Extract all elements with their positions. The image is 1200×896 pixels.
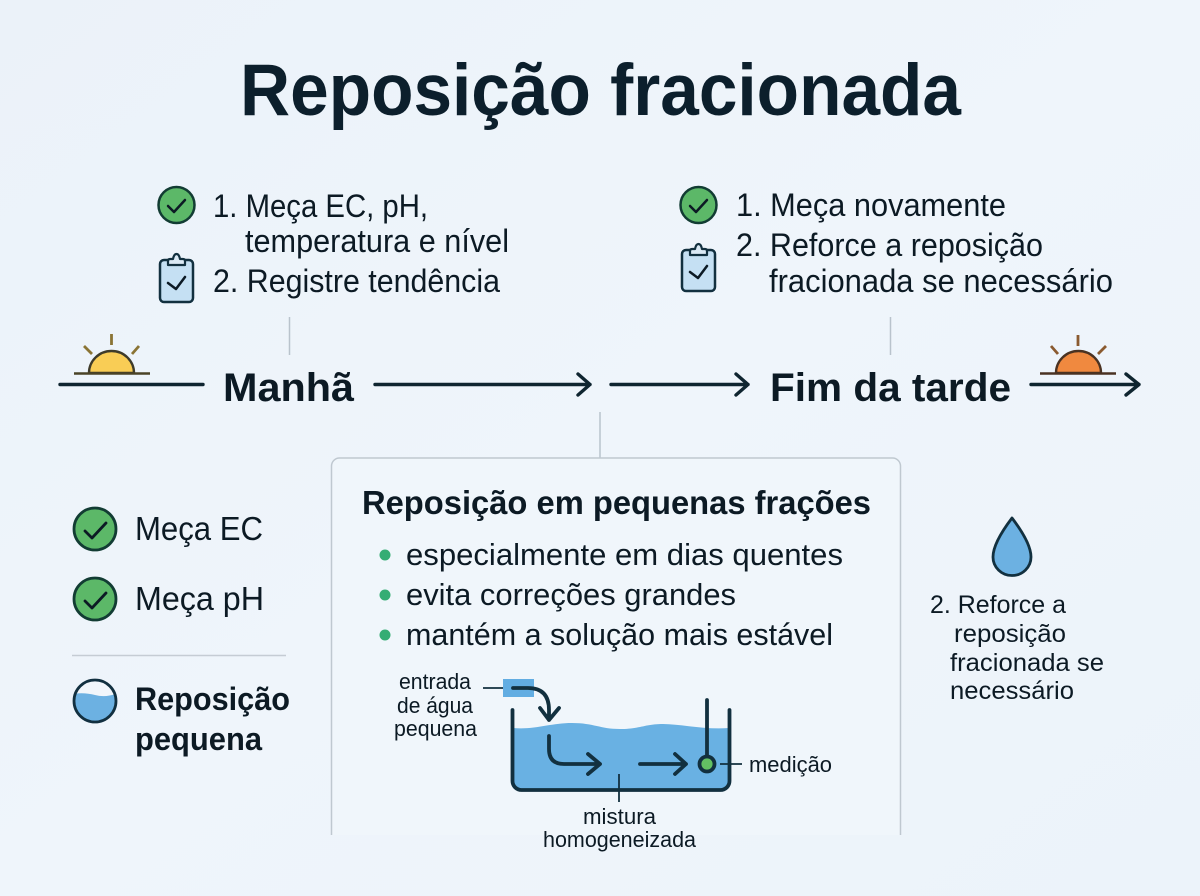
- arrow: after evening: [1031, 374, 1139, 395]
- diagram labels: medição: [749, 752, 832, 777]
- text: reinforce note: reposição: [954, 620, 1066, 648]
- bullet list: evita correções grandes: [406, 577, 736, 612]
- icon: sunrise: [74, 334, 150, 374]
- probe: [700, 700, 742, 772]
- diagram labels: entrada: [399, 669, 472, 694]
- text: step 2 evening: 2. Reforce a reposição: [736, 227, 1043, 263]
- title: Reposição fracionada: [240, 50, 962, 131]
- text: step 2 morning: 2. Registre tendência: [213, 263, 500, 299]
- icon: check pH: [74, 578, 116, 620]
- diagram: tank: [394, 669, 832, 852]
- text: measure pH: Meça pH: [135, 580, 264, 617]
- panel: right note: [930, 518, 1104, 705]
- icon: clipboard: [682, 244, 715, 291]
- icon: green check: [680, 187, 716, 223]
- bullet list: especialmente em dias quentes: [406, 537, 843, 572]
- panel: small fractions card: [332, 458, 900, 852]
- diagram labels: [394, 669, 832, 852]
- bullet list: [380, 537, 843, 652]
- icon: check EC: [74, 508, 116, 550]
- icon: small water level: [72, 680, 119, 727]
- bullet list: mantém a solução mais estável: [406, 617, 833, 652]
- text: step 2 evening: [736, 227, 1113, 299]
- text: reinforce note: [930, 591, 1104, 705]
- mixing arrows: [549, 736, 686, 774]
- text: step 2 evening: fracionada se necessário: [769, 263, 1113, 299]
- diagram labels: pequena: [394, 716, 478, 741]
- text: reinforce note: necessário: [950, 677, 1074, 705]
- text: step 1 evening: 1. Meça novamente: [736, 187, 1006, 223]
- icon: water drop: [993, 518, 1031, 576]
- label: evening: Fim da tarde: [770, 366, 1011, 410]
- text: small top-up: pequena: [135, 721, 262, 757]
- text: small top-up: Reposição: [135, 681, 290, 717]
- text: measure EC: Meça EC: [135, 510, 263, 547]
- diagram labels: homogeneizada: [543, 827, 697, 852]
- timeline: [60, 334, 1139, 410]
- diagram labels: de água: [397, 693, 474, 718]
- text: reinforce note: 2. Reforce a: [930, 591, 1066, 619]
- inlet: [483, 679, 559, 720]
- icon: green check: [158, 187, 194, 223]
- icon: clipboard: [160, 254, 193, 302]
- arrow: morning to midpoint: [375, 374, 590, 395]
- heading: Reposição em pequenas frações: [362, 484, 871, 521]
- diagram labels: mistura: [583, 804, 657, 829]
- label: morning: Manhã: [223, 366, 355, 410]
- panel: left summary: [72, 508, 290, 757]
- panel: evening checklist: [680, 187, 1113, 299]
- tank walls: [512, 710, 730, 790]
- icon: sunset: [1040, 335, 1116, 374]
- text: step 1 morning: [213, 188, 509, 259]
- panel: morning checklist: [158, 187, 509, 302]
- text: step 1 morning: temperatura e nível: [245, 223, 509, 259]
- text: small top-up: [135, 681, 290, 757]
- text: reinforce note: fracionada se: [950, 649, 1104, 677]
- arrow: midpoint to evening: [611, 374, 748, 395]
- text: step 1 morning: 1. Meça EC, pH,: [213, 188, 428, 224]
- water: [513, 723, 729, 790]
- arrow: line before morning: [60, 383, 203, 386]
